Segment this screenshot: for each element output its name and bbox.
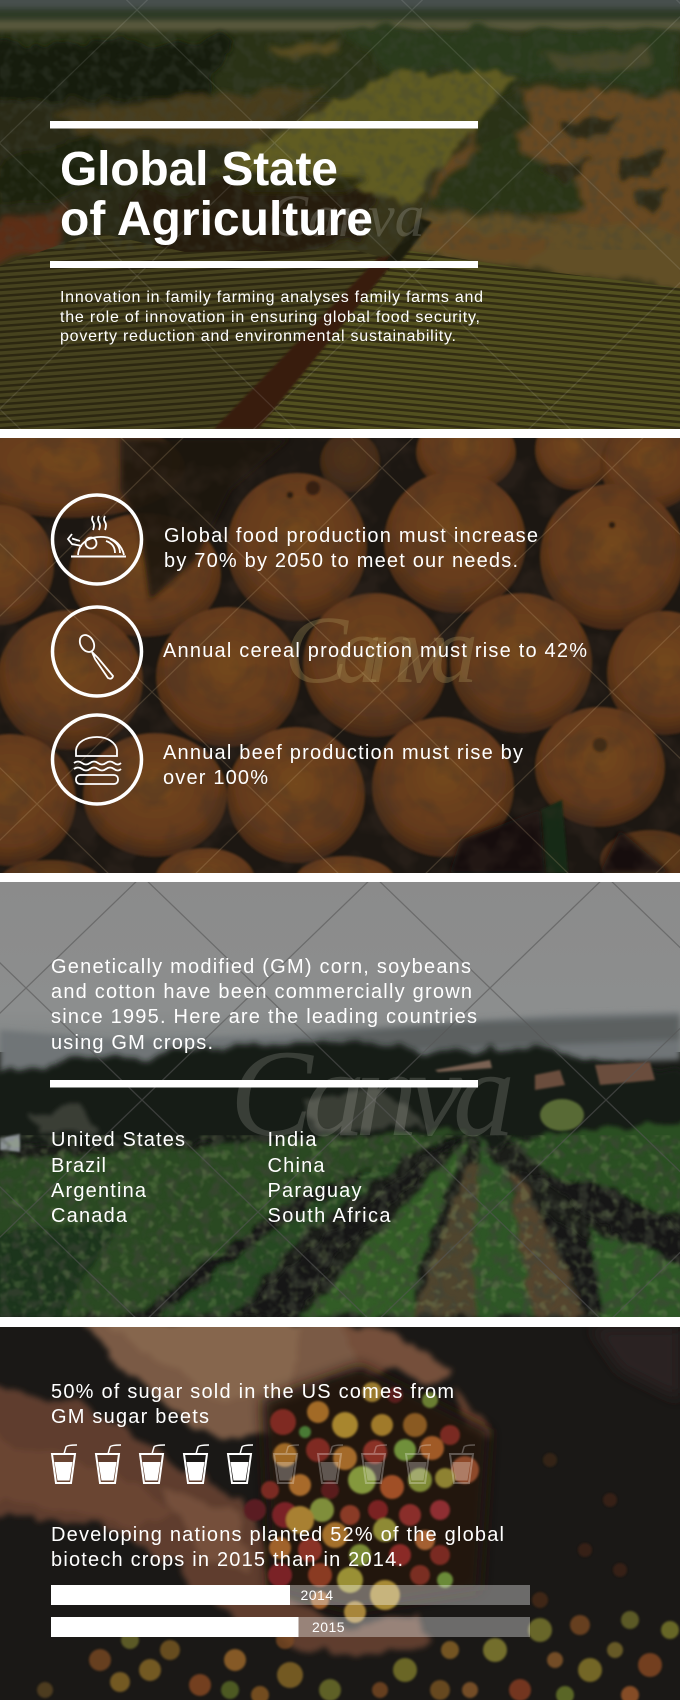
- biotech text: [51, 1524, 504, 1571]
- hands with coffee cherries photo: [0, 1320, 680, 1700]
- country list: right column: China: [268, 1155, 325, 1177]
- country list: right column: [268, 1129, 391, 1227]
- GM paragraph: since 1995. Here are the leading countries: [51, 1006, 477, 1028]
- country list: left column: [51, 1129, 185, 1227]
- intro paragraph: poverty reduction and environmental sustainability.: [60, 328, 456, 345]
- icon: burger: [52, 715, 142, 804]
- upper hand: [73, 1320, 362, 1442]
- title: Global State: [60, 143, 338, 196]
- GM paragraph: Genetically modified (GM) corn, soybeans: [51, 956, 471, 978]
- striped crop rows: [0, 232, 400, 429]
- country list: right column: India: [268, 1129, 317, 1151]
- biotech text: Developing nations planted 52% of the global: [51, 1524, 504, 1546]
- country list: right column: South Africa: [268, 1205, 391, 1227]
- title: [60, 143, 373, 246]
- Canva watermark: Canva: [268, 183, 425, 249]
- panel: GM crops: [0, 882, 680, 1330]
- country list: right column: Paraguay: [268, 1180, 362, 1202]
- divider rule: [50, 1080, 478, 1088]
- vineyard photo: [0, 882, 680, 1330]
- icon: roast chicken: [52, 495, 142, 584]
- intro paragraph: Innovation in family farming analyses family farms and: [60, 289, 483, 306]
- icon row: 5 of 10 drink cups: [52, 1445, 475, 1483]
- country list: left column: Argentina: [51, 1180, 147, 1202]
- top rule: [50, 121, 478, 128]
- text: beef production: over 100%: [163, 767, 268, 789]
- bar: 2014: 2014: [300, 1587, 333, 1603]
- Canva watermark: Canva: [230, 1025, 515, 1162]
- country list: left column: United States: [51, 1129, 185, 1151]
- text: food production: by 70% by 2050 to meet our needs.: [164, 550, 518, 572]
- aerial farm photo: [0, 0, 680, 429]
- icon: spoon: [52, 607, 142, 696]
- title: of Agriculture: [60, 193, 373, 246]
- stat: food production: [52, 495, 538, 584]
- text: food production: Global food production must increase: [164, 525, 538, 547]
- sugar text: GM sugar beets: [51, 1406, 209, 1428]
- GM paragraph: [51, 956, 477, 1054]
- panel: food production needs: [0, 410, 680, 912]
- panel: global state of agriculture header: [0, 0, 680, 429]
- vine rows: [0, 1130, 470, 1317]
- sugar text: [51, 1381, 454, 1428]
- lower hand: [0, 1384, 430, 1662]
- oranges photo: [0, 410, 680, 912]
- stat: beef production: [52, 715, 523, 804]
- text: beef production: Annual beef production must rise by: [163, 742, 523, 764]
- country list: left column: Brazil: [51, 1155, 106, 1177]
- text: beef production: [163, 742, 523, 789]
- right tan field: [430, 88, 680, 240]
- bar: 2015: [51, 1617, 530, 1637]
- road: [214, 254, 400, 429]
- Canva watermark: Canva: [284, 596, 478, 703]
- biotech text: biotech crops in 2015 than in 2014.: [51, 1549, 403, 1571]
- sugar text: 50% of sugar sold in the US comes from: [51, 1381, 454, 1403]
- stat: cereal production: [52, 607, 587, 696]
- GM paragraph: and cotton have been commercially grown: [51, 981, 472, 1003]
- intro paragraph: [60, 289, 483, 345]
- intro paragraph: the role of innovation in ensuring global food security,: [60, 309, 480, 326]
- text: cereal production: Annual cereal production must rise to 42%: [163, 640, 587, 662]
- bar chart: biotech crops 2014 vs 2015: [51, 1585, 530, 1637]
- GM paragraph: using GM crops.: [51, 1032, 213, 1054]
- country list: left column: Canada: [51, 1205, 128, 1227]
- bottom rule: [50, 261, 478, 268]
- panel: sugar and biotech crops: [0, 1320, 680, 1700]
- bar: 2014: [51, 1585, 530, 1605]
- bar: 2015: 2015: [312, 1619, 345, 1635]
- text: food production: [164, 525, 538, 572]
